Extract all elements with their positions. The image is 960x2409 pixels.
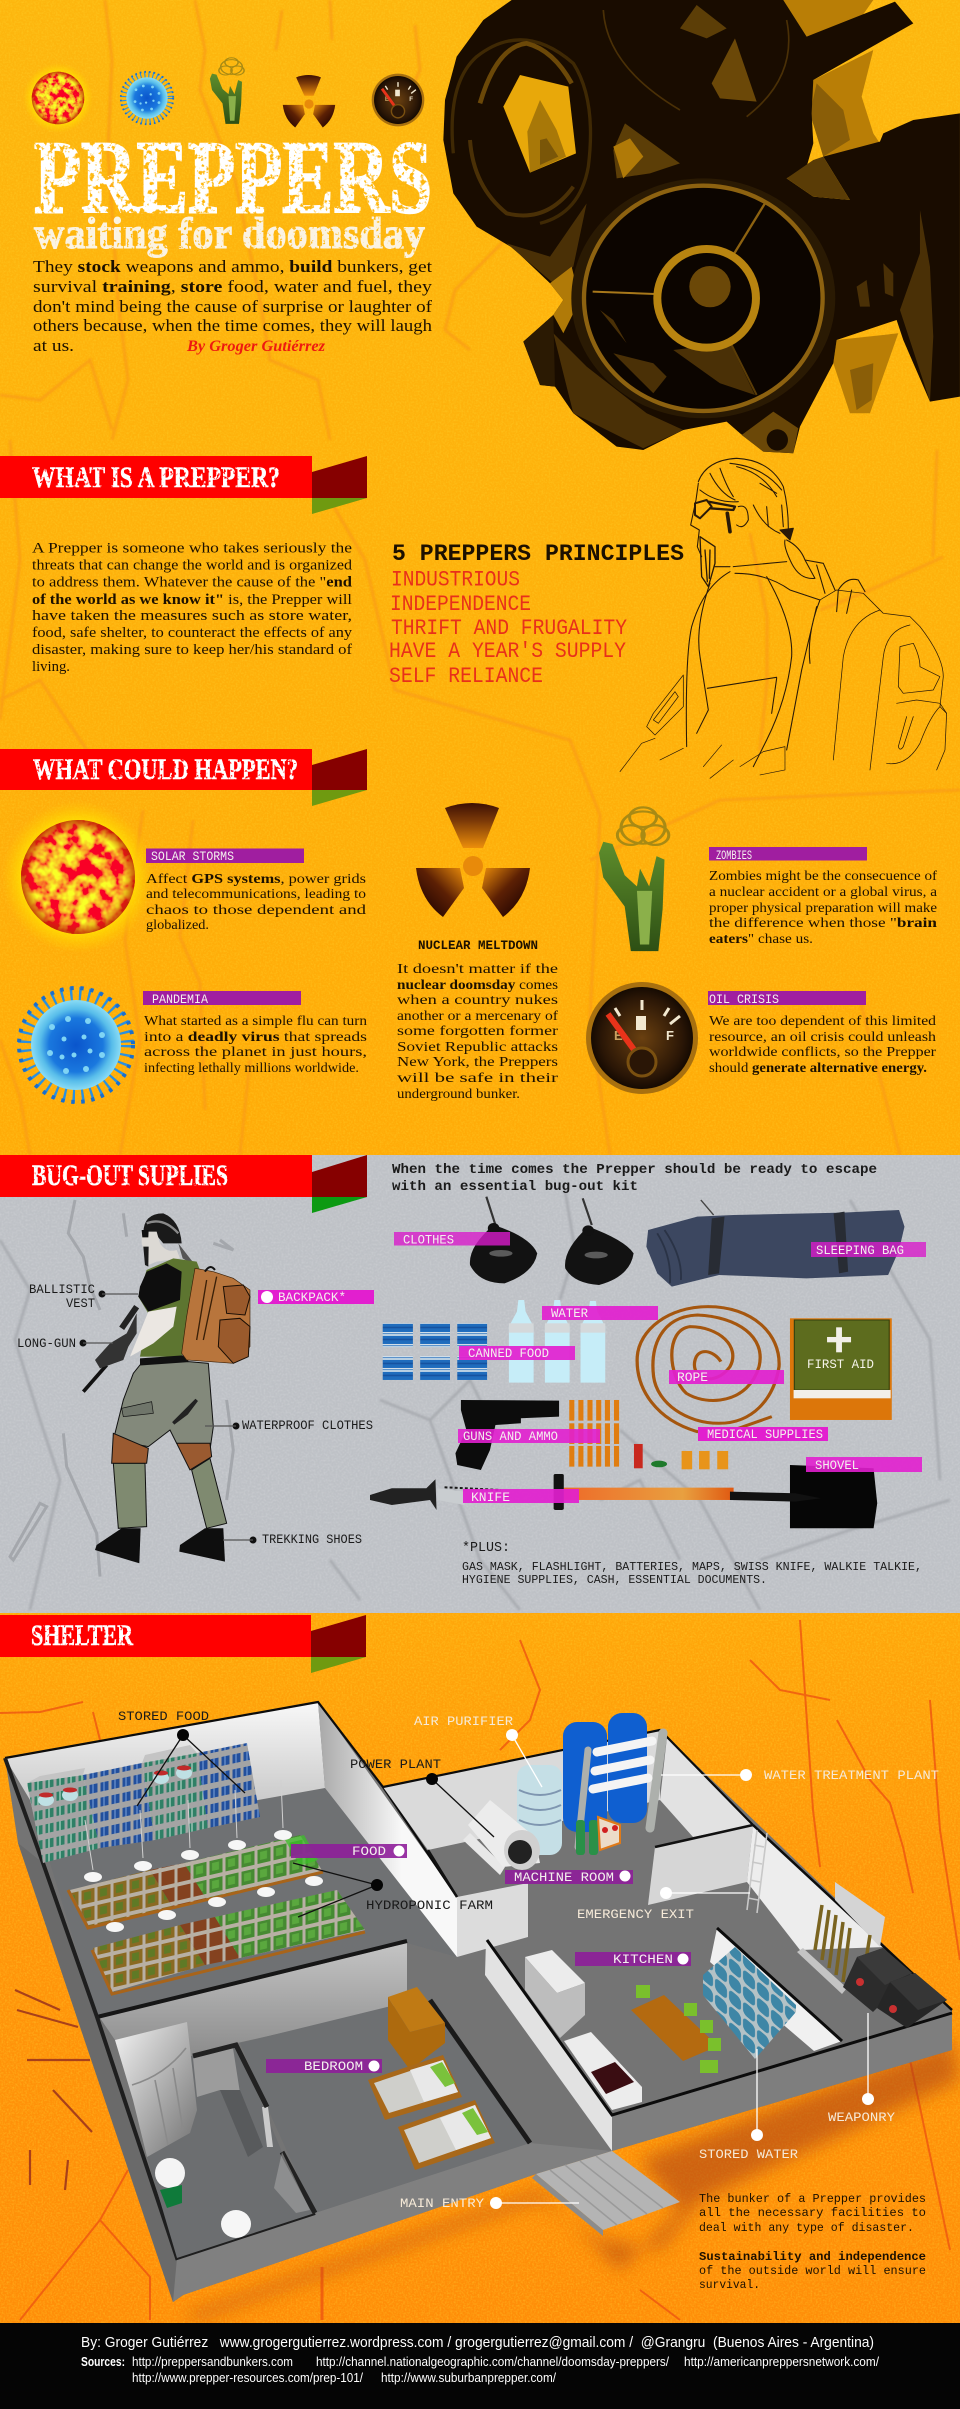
text: definition: food, safe shelter, to counteract the effects of any — [32, 625, 353, 641]
text: kit intro — [392, 1162, 877, 1195]
text: definition: to address them. Whatever the cause of the " end — [32, 574, 353, 590]
callouts: soldier gear: BALLISTIC — [29, 1283, 95, 1297]
panel: oil crisis: resource, an oil crisis could unleash — [709, 1029, 936, 1044]
callouts: bunker: AIR PURIFIER — [414, 1714, 513, 1729]
list: 5 preppers principles — [389, 541, 684, 689]
footer: http://americanpreppersnetwork.com/ — [684, 2355, 879, 2369]
footer: http://www.suburbanprepper.com/ — [381, 2371, 556, 2385]
icon: fuel gauge — [372, 74, 424, 126]
bathroom — [115, 2022, 315, 2258]
list: 5 preppers principles: INDUSTRIOUS — [391, 568, 520, 592]
labels: bunker rooms: BEDROOM — [304, 2060, 363, 2074]
text: plus list — [462, 1540, 922, 1587]
panel: solar storms: globalized. — [146, 917, 209, 932]
labels: kit: WATER — [551, 1307, 588, 1321]
left eyepiece — [452, 40, 591, 223]
gas mask illustration — [443, 0, 960, 453]
text: kit intro: When the time comes the Prepper should be ready to escape — [392, 1162, 877, 1178]
text: plus list: *PLUS: — [462, 1540, 510, 1556]
icon: zombie hand — [210, 58, 244, 124]
panel: pandemia: What started as a simple flu can turn — [144, 1013, 367, 1028]
panel: nuclear meltdown: will be safe in their — [397, 1070, 559, 1085]
kitchen — [485, 1928, 952, 2151]
labels: bunker rooms: FOOD — [352, 1845, 386, 1859]
item: rope — [637, 1307, 779, 1432]
panel: solar storms: Affect GPS systems , power grids — [146, 871, 366, 886]
panel: nuclear meltdown: Soviet Republic attacks — [397, 1039, 558, 1054]
subtitle: waiting for doomsday — [34, 209, 425, 258]
intro paragraph: don't mind being the cause of surprise or laughter of — [33, 297, 432, 316]
labels: kit: CANNED FOOD — [468, 1347, 549, 1361]
panel: nuclear meltdown: when a country nukes — [397, 992, 558, 1007]
panel: oil crisis: We are too dependent of this limited — [709, 1013, 936, 1028]
panel: zombies: ZOMBIES — [716, 849, 752, 863]
footer — [0, 2323, 960, 2409]
icon: radiation — [283, 75, 335, 127]
label: backpack: BACKPACK* — [278, 1291, 346, 1305]
panel: pandemia: infecting lethally millions worldwide. — [144, 1060, 359, 1075]
intro paragraph: others because, when the time comes, they will laugh — [33, 316, 433, 335]
icon: zombie hand large — [599, 807, 669, 951]
machine: air purifier — [517, 1765, 562, 1855]
label: first aid text: FIRST AID — [807, 1357, 874, 1372]
banner: what is a prepper: WHAT IS A PREPPER? — [32, 461, 280, 494]
icon: virus — [121, 72, 173, 124]
hanging lamps — [84, 1182, 323, 1932]
panel: nuclear meltdown: nuclear doomsday comes — [397, 977, 558, 992]
text: bunker summary — [699, 2192, 926, 2292]
machine: pipes — [578, 1733, 663, 1847]
sketch: prepper with backpack — [620, 458, 947, 778]
callouts: soldier gear: VEST — [66, 1297, 95, 1311]
labels: bunker rooms: KITCHEN — [613, 1953, 673, 1967]
entry stairs — [532, 2151, 680, 2236]
icon: virus large — [19, 988, 133, 1102]
intro paragraph: at us. — [33, 336, 74, 355]
filter canister — [571, 178, 835, 418]
bathroom: sink and cabinet — [155, 2158, 185, 2188]
text: definition: of the world as we know it" is, the Prepper will — [32, 592, 352, 608]
item: medical supplies — [634, 1444, 728, 1469]
labels: bunker rooms: MACHINE ROOM — [514, 1871, 614, 1885]
labels: kit: SLEEPING BAG — [816, 1244, 904, 1258]
background: orange cracked wall — [0, 0, 960, 1155]
text: definition: living. — [32, 659, 70, 675]
labels: kit: CLOTHES — [403, 1234, 454, 1248]
panel: oil crisis: should generate alternative energy. — [709, 1060, 927, 1075]
panel: solar storms — [2, 801, 366, 953]
labels: bunker rooms — [266, 1844, 691, 2074]
panel: nuclear meltdown — [397, 803, 559, 1101]
hydroponic farm beds — [68, 1835, 365, 1994]
panel: zombies: proper physical preparation will make — [709, 900, 937, 915]
item: canned food — [383, 1323, 487, 1380]
panel: oil crisis: worldwide conflicts, so the Prepper — [709, 1044, 937, 1059]
list: 5 preppers principles: THRIFT AND FRUGALITY — [391, 616, 627, 641]
callouts: bunker: EMERGENCY EXIT — [577, 1907, 694, 1922]
text: kit intro: with an essential bug-out kit — [392, 1179, 638, 1195]
footer: Sources: — [81, 2355, 125, 2369]
labels: kit: MEDICAL SUPPLIES — [707, 1428, 823, 1442]
storage room — [5, 1702, 528, 2258]
panel: solar storms: SOLAR STORMS — [151, 850, 234, 864]
illustration: soldier — [83, 1213, 250, 1563]
bathroom: shower — [115, 2022, 197, 2157]
labels: kit: SHOVEL — [815, 1459, 859, 1473]
machine: water tanks — [563, 1713, 647, 1832]
text: definition: A Prepper is someone who takes seriously the — [32, 540, 352, 556]
callouts: bunker: HYDROPONIC FARM — [366, 1899, 493, 1913]
label: backpack — [258, 1290, 374, 1305]
footer: http://channel.nationalgeographic.com/channel/doomsday-preppers/ — [316, 2355, 669, 2369]
panel: nuclear meltdown: some forgotten former — [397, 1023, 559, 1038]
bedroom: wardrobe — [388, 1987, 445, 2070]
text: bunker summary: Sustainability and independence — [699, 2250, 926, 2264]
text: bunker summary: deal with any type of disaster. — [699, 2221, 914, 2235]
panel: pandemia: into a deadly virus that spreads — [144, 1029, 367, 1044]
panel: nuclear meltdown: another or a mercenary of — [397, 1008, 559, 1023]
list: 5 preppers principles: SELF RELIANCE — [389, 664, 543, 689]
panel: zombies: a nuclear accident or a global virus, a — [709, 884, 937, 899]
text: definition: disaster, making sure to keep her/his standard of — [32, 642, 352, 658]
illustration: kit items — [370, 1197, 904, 1528]
footer: http://www.prepper-resources.com/prep-101/ — [132, 2371, 363, 2385]
weapon rack — [797, 1882, 885, 1994]
ladder: emergency exit — [747, 1830, 767, 1913]
banner: what could happen — [0, 749, 367, 806]
callouts: soldier gear: LONG-GUN — [17, 1337, 76, 1351]
text: bunker summary: all the necessary facilities to — [699, 2206, 926, 2220]
icon: fuel gauge large — [586, 982, 698, 1094]
panel: nuclear meltdown: It doesn't matter if the — [397, 961, 558, 976]
panel: pandemia: PANDEMIA — [152, 993, 208, 1007]
text: plus list: HYGIENE SUPPLIES, CASH, ESSENTIAL DOCUMENTS. — [462, 1574, 767, 1587]
callouts: soldier gear: WATERPROOF CLOTHES — [242, 1419, 373, 1433]
panel: zombies: Zombies might be the consecuence of — [709, 868, 938, 883]
callouts: bunker: WATER TREATMENT PLANT — [764, 1768, 939, 1783]
intro paragraph: They stock weapons and ammo, build bunkers, get — [33, 257, 432, 276]
labels: kit: KNIFE — [471, 1491, 510, 1505]
item: first aid kit — [790, 1318, 892, 1420]
panel: solar storms: chaos to those dependent and — [146, 902, 366, 917]
panel: shelter background — [0, 1613, 960, 2323]
illustration: bunker floor plan — [5, 1182, 960, 2320]
panel: oil crisis: OIL CRISIS — [709, 993, 779, 1007]
banner: shelter: SHELTER — [31, 1619, 133, 1652]
panel: oil crisis — [586, 982, 937, 1094]
callouts: soldier gear: TREKKING SHOES — [262, 1533, 362, 1547]
banner: bug-out suplies — [0, 1155, 367, 1213]
upper mask details — [507, 5, 789, 448]
machine: generator — [463, 1800, 540, 1875]
byline: By Groger Gutiérrez — [186, 338, 326, 355]
callouts: bunker: MAIN ENTRY — [400, 2196, 484, 2211]
footer: By: Groger Gutiérrez www.grogergutierrez.wordpress.com / grogergutierrez@gmail.com / @Grangru (Buenos Aires - Argentina) — [81, 2335, 874, 2351]
panel: nuclear meltdown: underground bunker. — [397, 1086, 520, 1101]
callouts: bunker — [118, 1710, 939, 2211]
banner: what is a prepper — [0, 456, 367, 514]
labels: kit: ROPE — [677, 1371, 708, 1385]
machine room — [383, 1713, 952, 2010]
list: 5 preppers principles: 5 PREPPERS PRINCIPLES — [392, 541, 684, 567]
bathroom: toilet — [221, 2210, 251, 2238]
panel: pandemia: across the planet in just hours, — [144, 1044, 367, 1059]
text: definition: threats that can change the world and is organized — [32, 558, 353, 574]
text: definition: have taken the measures such as store water, — [32, 608, 352, 624]
top icon row — [23, 58, 424, 133]
list: 5 preppers principles: INDEPENDENCE — [390, 592, 531, 617]
item: shovel — [554, 1465, 877, 1528]
title: PREPPERS — [34, 120, 432, 235]
callouts: soldier gear — [17, 1283, 373, 1547]
item: water bottles — [509, 1300, 605, 1383]
item: clothes bags — [470, 1197, 634, 1285]
text: bunker summary: survival. — [699, 2278, 760, 2292]
text: definition — [32, 540, 353, 675]
safes — [843, 1948, 947, 2028]
icon: sun — [23, 63, 93, 133]
text: bunker summary: of the outside world will ensure — [699, 2264, 926, 2278]
item: ammunition — [569, 1400, 619, 1467]
panel: zombies: eaters " chase us. — [709, 931, 813, 946]
callouts: bunker: STORED FOOD — [118, 1710, 209, 1724]
labels: kit — [394, 1232, 926, 1505]
icon: sun large — [2, 801, 154, 953]
list: 5 preppers principles: HAVE A YEAR'S SUPPLY — [389, 639, 626, 664]
building shadow — [185, 2040, 960, 2320]
item: sleeping bag — [646, 1200, 904, 1287]
panel: bug-out supplies background — [0, 1155, 960, 1613]
panel: nuclear meltdown: NUCLEAR MELTDOWN — [418, 938, 538, 953]
callouts: bunker: STORED WATER — [699, 2147, 798, 2162]
panel: nuclear meltdown: New York, the Preppers — [397, 1054, 558, 1069]
machine: gas tanks and panel — [576, 1817, 620, 1855]
banner: shelter — [0, 1615, 366, 1673]
panel: zombies: the difference when those " brain — [709, 915, 938, 930]
text: bunker summary: The bunker of a Prepper provides — [699, 2192, 926, 2206]
building base — [5, 1702, 952, 2302]
shelves: stored food — [27, 1743, 260, 1863]
icon: radiation large — [416, 803, 530, 917]
panel: zombies — [599, 807, 938, 951]
bedroom: beds — [368, 2055, 495, 2170]
footer: http://preppersandbunkers.com — [132, 2355, 293, 2369]
item: knife — [370, 1479, 501, 1510]
callouts: bunker: POWER PLANT — [350, 1758, 442, 1772]
labels: kit: GUNS AND AMMO — [463, 1430, 558, 1444]
text: plus list: GAS MASK, FLASHLIGHT, BATTERIES, MAPS, SWISS KNIFE, WALKIE TALKIE, — [462, 1561, 922, 1574]
panel: solar storms: and telecommunications, leading to — [146, 886, 366, 901]
panel: pandemia — [19, 988, 367, 1102]
intro paragraph: survival training , store food, water and fuel, they — [33, 277, 433, 296]
water storage racks — [703, 1947, 796, 2059]
intro paragraph — [33, 257, 433, 355]
banner: what could happen: WHAT COULD HAPPEN? — [33, 753, 298, 786]
callouts: bunker: WEAPONRY — [828, 2110, 895, 2125]
item: pistol — [455, 1400, 559, 1470]
bedroom — [240, 1987, 530, 2213]
outer walls — [18, 1843, 183, 2302]
banner: bug-out suplies: BUG-OUT SUPLIES — [32, 1159, 228, 1192]
